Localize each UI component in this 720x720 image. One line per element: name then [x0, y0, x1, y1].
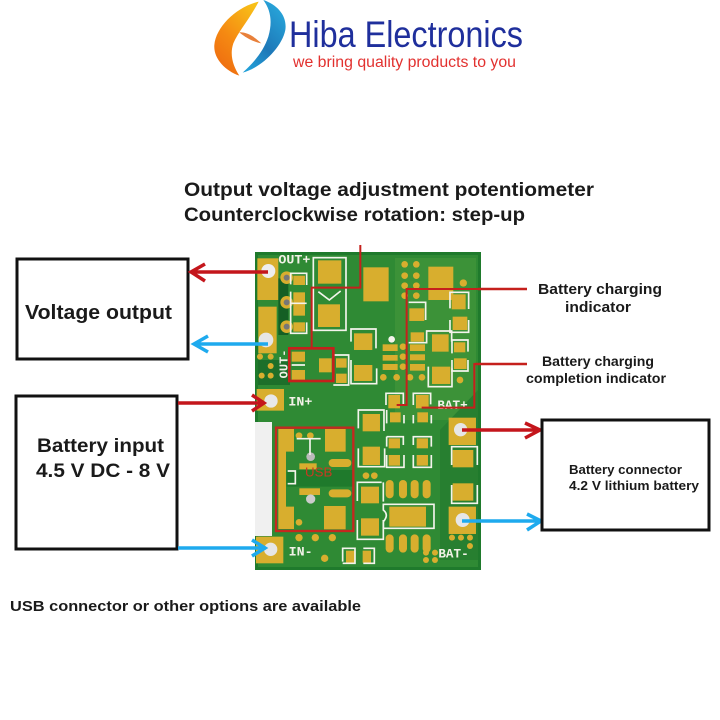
arrow: input negative: [178, 540, 266, 556]
panel: battery connector: Battery connector: [569, 463, 682, 477]
label: battery charging indicator: [538, 282, 662, 316]
heading: potentiometer: Counterclockwise rotation: step-up: [184, 204, 525, 226]
upper board components: OUT+: [278, 254, 310, 269]
note: USB option: USB connector or other options are available: [10, 598, 361, 615]
panel: battery input: 4.5 V DC - 8 V: [36, 460, 170, 482]
heading: potentiometer: Output voltage adjustment potentiometer: [184, 179, 594, 201]
label: battery charging indicator: Battery charging: [538, 282, 662, 298]
arrow: battery negative: [462, 514, 541, 530]
lower board components: BAT-: [438, 547, 469, 562]
label: charging completion indicator: Battery charging: [542, 354, 654, 369]
panel: circuit board: [255, 245, 490, 570]
panel: battery input: Battery input: [37, 435, 165, 457]
lower board components: USB: [305, 465, 332, 479]
lower board components: [256, 410, 477, 563]
heading: potentiometer: [184, 179, 594, 226]
potentiometer marker: [289, 245, 490, 408]
arrow: output positive: [191, 264, 268, 281]
brand name: Hiba Electronics: [289, 14, 523, 56]
leader: charging indicators: [475, 289, 527, 364]
USB outline: [276, 428, 353, 531]
label: charging completion indicator: completion indicator: [526, 371, 667, 386]
USB cutout: [255, 422, 272, 536]
upper board components: BAT+: [437, 398, 468, 413]
board base: [255, 252, 481, 570]
panel: voltage output: [17, 259, 188, 359]
upper board components: OUT-: [277, 350, 291, 378]
lower board components: IN-: [289, 546, 313, 561]
upper board components: [257, 254, 469, 413]
panel: voltage output: Voltage output: [25, 301, 172, 324]
arrow: battery positive: [462, 423, 540, 438]
upper board components: IN+: [288, 396, 312, 411]
panel: battery connector: [542, 420, 709, 530]
label: battery charging indicator: indicator: [565, 300, 631, 316]
arrow: input positive: [178, 395, 264, 411]
icon: logo swoosh: [214, 0, 286, 76]
arrow: output negative: [194, 336, 268, 352]
panel: battery input: [16, 396, 177, 549]
tagline: we bring quality products to you: [292, 54, 516, 71]
logo: Hiba Electronics: [214, 0, 523, 76]
panel: battery connector: 4.2 V lithium battery: [569, 479, 699, 493]
label: charging completion indicator: [526, 354, 667, 386]
